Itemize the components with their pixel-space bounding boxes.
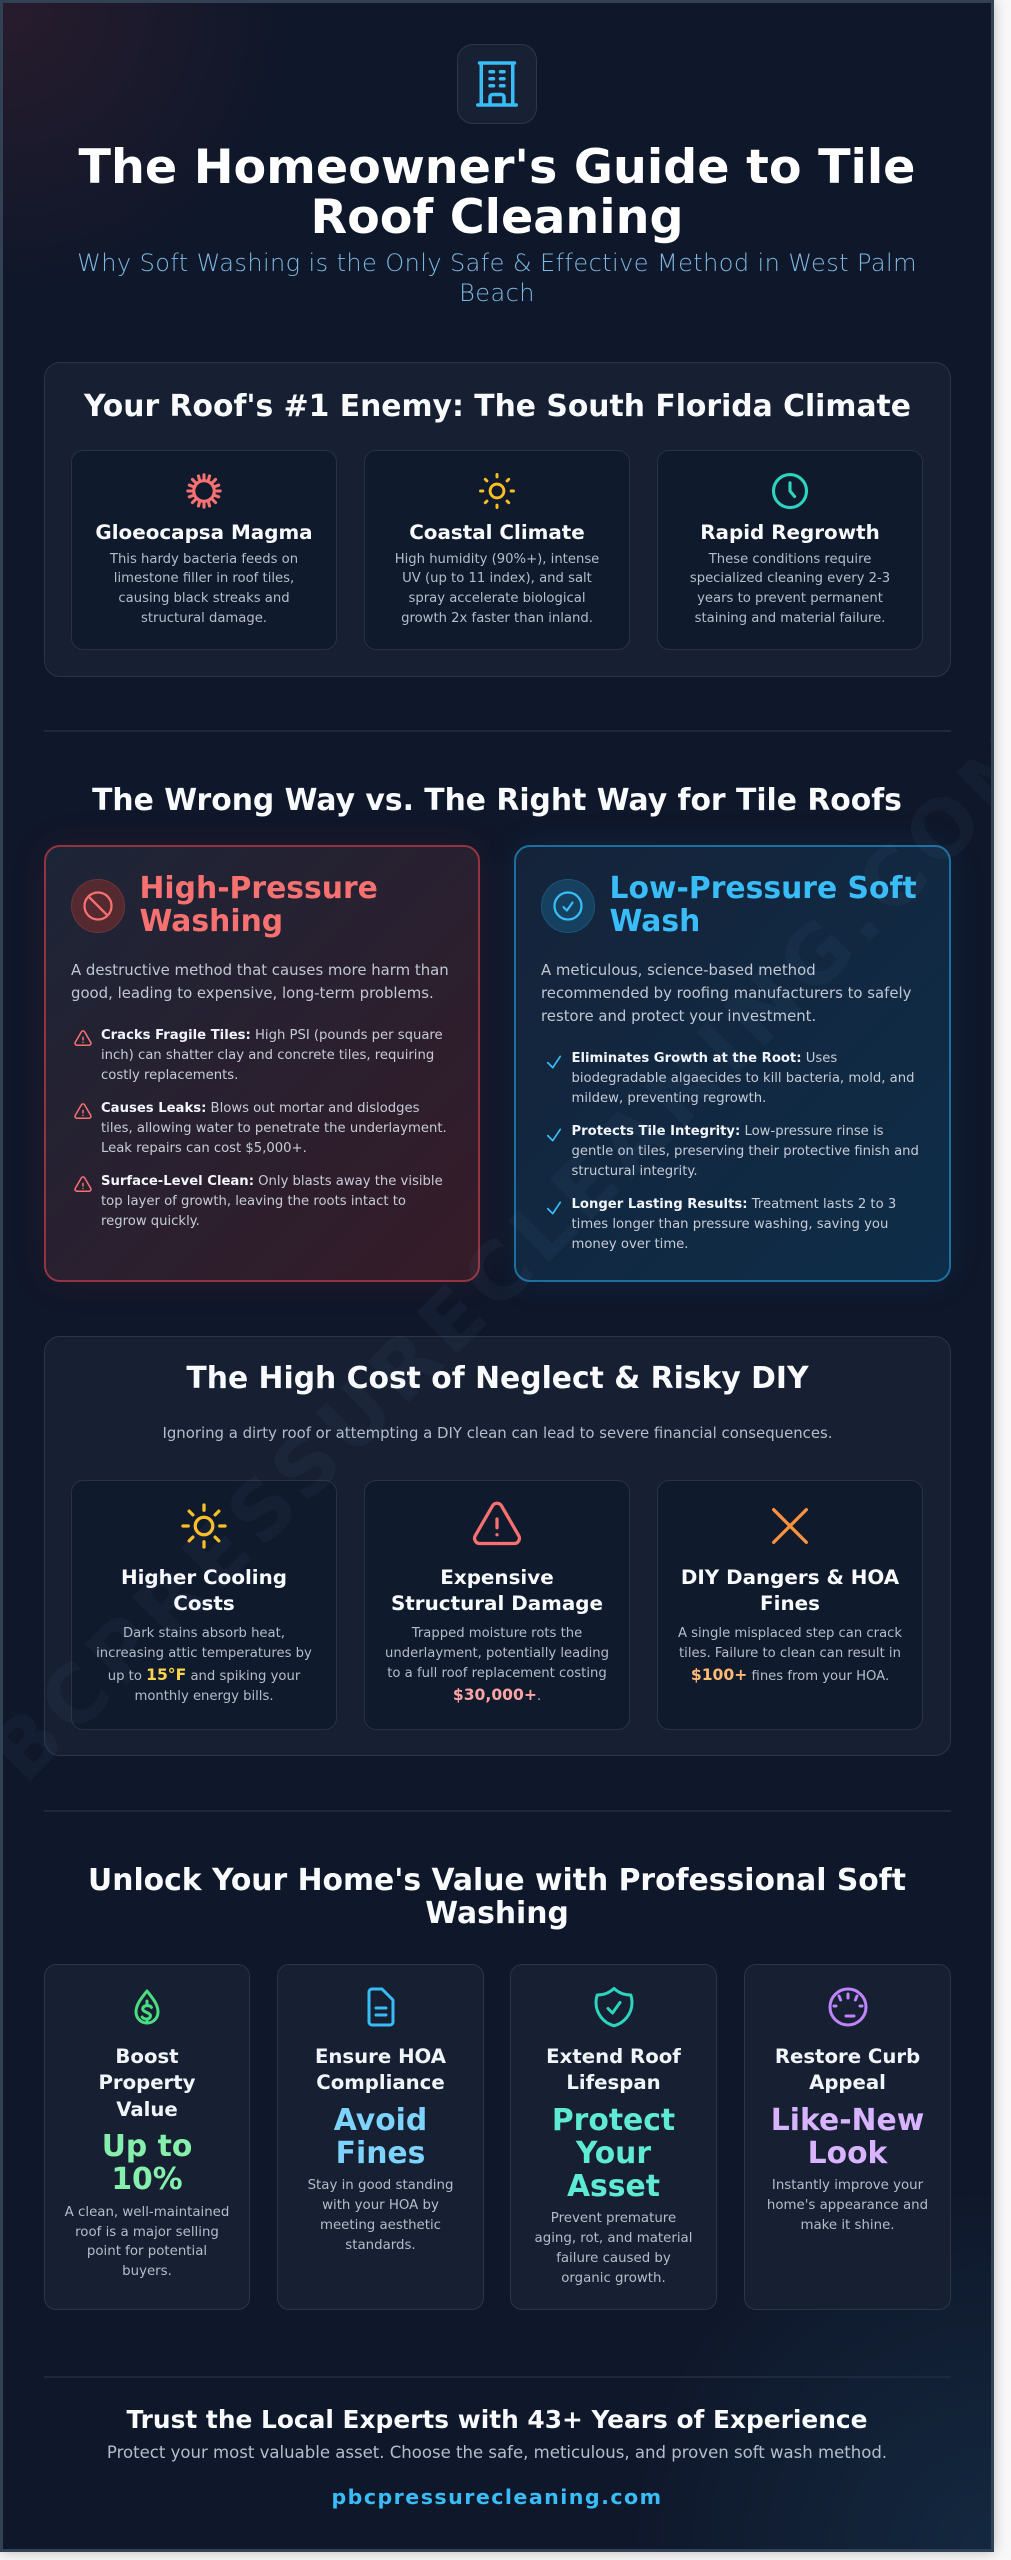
- list item: eliminates growth: mildew, preventing regrowth.: [572, 1091, 766, 1106]
- panel text: [541, 961, 912, 1025]
- stat: Your: [576, 2136, 651, 2171]
- card text: to a full roof replacement costing: [387, 1666, 607, 1681]
- card title: Costs: [173, 1592, 235, 1615]
- card text: causing black streaks and: [118, 591, 290, 606]
- card text: staining and material failure.: [695, 611, 885, 626]
- list item: cracks: inch) can shatter clay and concrete tiles, requiring: [101, 1048, 434, 1063]
- icon: dollar drop: [134, 1989, 160, 2024]
- heading: unlock value: [88, 1863, 906, 1931]
- footer: [3, 2399, 991, 2519]
- card text: High humidity (90%+), intense: [395, 552, 599, 566]
- panel title: [610, 871, 917, 939]
- card text: tiles. Failure to clean can result in: [679, 1646, 901, 1661]
- heading: climate: Your Roof's #1 Enemy: The South Florida Climate: [84, 389, 911, 424]
- card text: make it shine.: [800, 2218, 895, 2233]
- card text: $100+ fines from your HOA.: [691, 1666, 889, 1684]
- card text: [385, 1626, 609, 1704]
- card text: [64, 2205, 229, 2279]
- subtitle: [77, 249, 917, 307]
- stat: Fines: [336, 2136, 425, 2171]
- icon: sun: [181, 1503, 227, 1549]
- card text: structural damage.: [141, 611, 267, 626]
- card text: [308, 2178, 453, 2253]
- list item: protects tile: Protects Tile Integrity: Low-pressure rinse is: [572, 1124, 884, 1139]
- card: curb appeal: [744, 1964, 951, 2310]
- panel text: good, leading to expensive, long-term problems.: [71, 984, 434, 1002]
- panel title: Wash: [610, 904, 700, 939]
- stat: 10%: [111, 2162, 183, 2197]
- card text: roof is a major selling: [75, 2225, 219, 2240]
- panel title: [140, 871, 378, 939]
- stat: Avoid: [334, 2103, 427, 2138]
- icon: sun: [479, 473, 515, 509]
- card title: [745, 2044, 950, 2097]
- subtitle: Why Soft Washing is the Only Safe & Effective Method in West Palm: [77, 249, 917, 277]
- card title: Value: [116, 2098, 178, 2121]
- title: [78, 140, 915, 245]
- list item: longer lasting: Longer Lasting Results: Treatment lasts 2 to 3: [572, 1197, 896, 1212]
- card title: Restore Curb: [775, 2045, 920, 2068]
- card text: [535, 2211, 692, 2286]
- icon: document: [368, 1988, 394, 2026]
- card text: meeting aesthetic: [320, 2218, 441, 2233]
- list item: cracks: costly replacements.: [101, 1068, 238, 1083]
- icon: bacteria: [186, 473, 222, 509]
- card: rapid regrowth: [657, 450, 923, 650]
- stat: [102, 2129, 192, 2197]
- card title: Appeal: [809, 2071, 886, 2094]
- card: coastal climate: [364, 450, 630, 650]
- card text: [745, 2176, 950, 2236]
- card title: Boost: [115, 2045, 179, 2068]
- list item: eliminates growth: [546, 1051, 914, 1106]
- header icon: building: [457, 44, 537, 124]
- panel text: [71, 961, 449, 1002]
- card title: [98, 2045, 196, 2121]
- list item: surface clean: regrow quickly.: [101, 1214, 200, 1229]
- panel: climate: [44, 362, 951, 677]
- card text: limestone filler in roof tiles,: [114, 571, 294, 586]
- heading: unlock value: Washing: [425, 1896, 569, 1931]
- card title: [391, 1566, 603, 1615]
- card text: Trapped moisture rots the: [412, 1626, 582, 1641]
- card text: years to prevent permanent: [697, 591, 883, 606]
- panel: high-pressure washing: [44, 845, 480, 1282]
- card title: [681, 1566, 899, 1615]
- list item: surface clean: top layer of growth, leaving the roots intact to: [101, 1194, 406, 1209]
- panel text: recommended by roofing manufacturers to safely: [541, 984, 912, 1002]
- card text: [690, 552, 890, 626]
- stat: Up to: [102, 2129, 192, 2164]
- card title: Extend Roof: [546, 2045, 681, 2068]
- subtitle: Beach: [459, 279, 535, 307]
- card text: This hardy bacteria feeds on: [110, 552, 298, 566]
- card text: Stay in good standing: [308, 2178, 453, 2193]
- list item: leaks: Leak repairs can cost $5,000+.: [101, 1141, 307, 1156]
- card text: A single misplaced step can crack: [678, 1626, 902, 1641]
- card text: spray accelerate biological: [408, 591, 586, 606]
- icon: clock: [772, 473, 808, 510]
- card title: Compliance: [316, 2071, 445, 2094]
- list item: eliminates growth: Eliminates Growth at the Root: Uses: [572, 1051, 837, 1066]
- list item: protects tile: gentle on tiles, preserving their protective finish and: [572, 1144, 919, 1159]
- card text: [395, 552, 599, 626]
- icon: gauge: [824, 1983, 872, 2031]
- card: cooling costs: [71, 1480, 337, 1730]
- card: roof lifespan: [510, 1964, 717, 2310]
- card title: Gloeocapsa Magma: [95, 520, 313, 544]
- panel: high cost: [44, 1336, 951, 1756]
- card text: [110, 552, 298, 626]
- list item: surface clean: [74, 1174, 443, 1229]
- card text: Dark stains absorb heat,: [123, 1626, 285, 1641]
- list item: protects tile: [546, 1124, 919, 1179]
- card text: These conditions require: [709, 552, 871, 566]
- card text: monthly energy bills.: [134, 1689, 274, 1704]
- list item: leaks: Causes Leaks: Blows out mortar and dislodges: [101, 1101, 420, 1116]
- card text: aging, rot, and material: [535, 2231, 692, 2246]
- card title: Rapid Regrowth: [700, 520, 880, 544]
- card title: DIY Dangers & HOA: [681, 1566, 899, 1588]
- stat: [334, 2103, 427, 2171]
- card title: Lifespan: [566, 2071, 661, 2094]
- panel title: Low-Pressure Soft: [610, 871, 917, 906]
- heading: unlock value: Unlock Your Home's Value with Professional Soft: [88, 1863, 906, 1898]
- stat: Protect: [552, 2103, 675, 2138]
- card text: A clean, well-maintained: [65, 2205, 229, 2220]
- panel text: restore and protect your investment.: [541, 1007, 816, 1025]
- panel text: Ignoring a dirty roof or attempting a DIY clean can lead to severe financial consequences.: [162, 1424, 833, 1442]
- card text: home's appearance and: [767, 2198, 928, 2213]
- footer url: pbcpressurecleaning.com: [331, 2485, 663, 2509]
- stat: Asset: [567, 2169, 660, 2204]
- card text: up to 15°F and spiking your: [108, 1666, 300, 1684]
- list item: longer lasting: times longer than pressure washing, saving you: [572, 1217, 888, 1232]
- card text: [678, 1626, 902, 1684]
- stat: [745, 2104, 950, 2170]
- stat: Look: [808, 2136, 887, 2171]
- card title: Property: [98, 2071, 196, 2094]
- card text: $30,000+.: [453, 1686, 541, 1704]
- card text: with your HOA by: [322, 2198, 439, 2213]
- card text: buyers.: [122, 2264, 172, 2279]
- card: hoa compliance: [277, 1964, 484, 2310]
- card title: Coastal Climate: [409, 520, 585, 544]
- card text: standards.: [345, 2238, 416, 2253]
- panel title: High-Pressure: [140, 871, 378, 906]
- card text: failure caused by: [556, 2251, 671, 2266]
- list item: longer lasting: money over time.: [572, 1237, 688, 1252]
- heading: wrong vs right: The Wrong Way vs. The Right Way for Tile Roofs: [92, 783, 902, 818]
- panel text: A meticulous, science-based method: [541, 961, 816, 979]
- card text: [96, 1626, 312, 1704]
- card text: Prevent premature: [551, 2211, 676, 2226]
- card text: UV (up to 11 index), and salt: [402, 571, 592, 586]
- panel title: Washing: [140, 904, 283, 939]
- icon: warning: [472, 1502, 522, 1546]
- title: The Homeowner's Guide to Tile: [79, 140, 915, 195]
- card: structural damage: [364, 1480, 630, 1730]
- card text: growth 2x faster than inland.: [401, 611, 593, 626]
- card title: Fines: [760, 1592, 820, 1615]
- list item: eliminates growth: biodegradable algaecides to kill bacteria, mold, and: [572, 1071, 914, 1086]
- icon: check circle: [541, 879, 595, 933]
- card text: Instantly improve your: [772, 2178, 923, 2193]
- list item: leaks: tiles, allowing water to penetrate the underlayment.: [101, 1121, 447, 1136]
- icon: ban: [71, 879, 125, 933]
- title: Roof Cleaning: [310, 190, 684, 245]
- card: gloeocapsa magma: [71, 450, 337, 650]
- list item: surface clean: Surface-Level Clean: Only blasts away the visible: [101, 1174, 443, 1189]
- list item: cracks: Cracks Fragile Tiles: High PSI (pounds per square: [101, 1028, 443, 1043]
- footer text: Protect your most valuable asset. Choose the safe, meticulous, and proven soft wash method.: [107, 2443, 887, 2462]
- list item: longer lasting: [546, 1197, 896, 1252]
- card title: Ensure HOA: [315, 2045, 446, 2068]
- card title: [315, 2045, 446, 2094]
- card title: [546, 2045, 681, 2094]
- stat: Like-New: [771, 2103, 924, 2138]
- card title: [121, 1566, 287, 1615]
- stat: [552, 2103, 675, 2204]
- card: boost property value: [44, 1964, 250, 2310]
- heading: high cost: The High Cost of Neglect & Risky DIY: [186, 1361, 809, 1396]
- card title: Higher Cooling: [121, 1566, 287, 1588]
- card text: increasing attic temperatures by: [96, 1646, 312, 1661]
- list item: leaks: [74, 1101, 447, 1156]
- icon: x: [772, 1508, 808, 1544]
- card text: organic growth.: [561, 2271, 666, 2286]
- panel text: A destructive method that causes more harm than: [71, 961, 449, 979]
- card title: Structural Damage: [391, 1592, 603, 1615]
- card text: underlayment, potentially leading: [385, 1646, 609, 1661]
- panel: low-pressure soft wash: [514, 845, 951, 1282]
- card text: point for potential: [87, 2244, 207, 2259]
- card text: specialized cleaning every 2-3: [690, 571, 890, 586]
- footer heading: Trust the Local Experts with 43+ Years of Experience: [126, 2405, 868, 2434]
- card title: Expensive: [440, 1566, 554, 1588]
- icon: shield check: [594, 1986, 634, 2028]
- card: diy dangers: [657, 1480, 923, 1730]
- list item: cracks: [74, 1028, 443, 1083]
- list item: protects tile: structural integrity.: [572, 1164, 698, 1179]
